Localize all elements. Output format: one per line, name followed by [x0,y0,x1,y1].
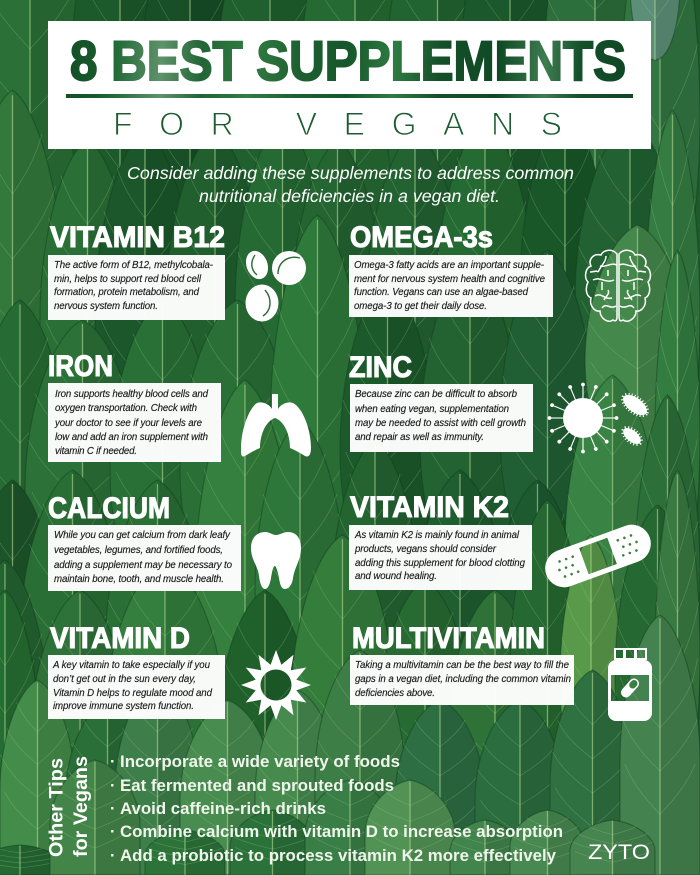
panel: vitamin k2: and wound healing. [355,571,437,582]
panel: multivitamin [350,622,574,705]
title banner [48,21,651,149]
panel: vitamin k2: products, vegans should consider [354,544,497,555]
intro text: nutritional deficiencies in a vegan diet. [199,186,500,206]
panel: multivitamin: deficiencies above. [355,688,435,699]
panel: zinc: may be needed to assist with cell growth [355,418,526,429]
panel: vitamin b12: min, helps to support red blood cell [54,274,202,285]
panel: calcium: CALCIUM [48,492,170,525]
panel: calcium: While you can get calcium from dark leafy [54,530,231,541]
intro text: Consider adding these supplements to address common [127,163,574,183]
panel: iron [48,350,221,462]
panel: iron: your doctor to see if your levels are [54,418,203,429]
tips list: · [110,800,116,818]
panel: vitamin b12 [48,221,225,320]
tips list: · [110,753,116,771]
icon: supplement bottle [608,648,652,721]
other tips heading: for Vegans [71,756,92,857]
panel: vitamin d: A key vitamin to take especially if you [52,660,211,671]
panel: multivitamin: Taking a multivitamin can be the best way to fill the [355,660,570,671]
panel: zinc: Because zinc can be difficult to absorb [355,389,518,400]
panel: calcium: adding a supplement may be necessary to [54,560,233,571]
panel: omega-3s: Omega-3 fatty acids are an important supple- [354,260,545,271]
icon: tooth [251,532,301,589]
panel: vitamin b12: The active form of B12, methylcobala- [54,260,214,271]
other tips heading [46,756,92,857]
panel: vitamin k2: As vitamin K2 is mainly found in animal [354,530,520,541]
icon: brain [586,250,650,321]
panel: vitamin k2: VITAMIN K2 [350,491,509,524]
subtitle: for vegans: FOR VEGANS [113,106,562,142]
panel: zinc [349,351,533,452]
tips list: Avoid caffeine-rich drinks [120,800,326,818]
panel: vitamin b12: VITAMIN B12 [50,221,225,254]
icon: virus and bacteria [548,383,650,453]
panel: iron: IRON [48,350,113,383]
icon: lungs [241,394,311,457]
panel: vitamin d: Vitamin D helps to regulate mood and [53,688,213,699]
panel: omega-3s: OMEGA-3s [350,221,493,254]
panel: vitamin d: VITAMIN D [50,622,190,655]
panel: omega-3s [349,221,553,317]
logo: zyto: ZYTO [588,841,650,864]
panel: vitamin d: improve immune system function. [53,701,194,712]
tips list [110,753,563,865]
tips list: Incorporate a wide variety of foods [120,753,400,771]
panel: zinc: when eating vegan, supplementation [355,404,509,415]
panel: multivitamin: MULTIVITAMIN [352,622,545,655]
intro text [127,163,574,206]
panel: zinc: ZINC [349,351,412,384]
panel: vitamin d: don’t get out in the sun every day, [53,674,196,685]
panel: iron: oxygen transportation. Check with [55,403,197,414]
panel: vitamin k2 [349,491,532,590]
other tips heading: Other Tips [46,758,68,857]
tips list: · [110,823,116,841]
icon: sun [241,650,311,720]
tips list: Add a probiotic to process vitamin K2 more effectively [120,847,557,865]
panel: iron: vitamin C if needed. [55,446,137,457]
panel: multivitamin: gaps in a vegan diet, including the common vitamin [355,674,571,685]
icon: blood cells [242,248,306,322]
tips list: Combine calcium with vitamin D to increase absorption [120,823,563,841]
panel: calcium [48,492,241,591]
panel: vitamin k2: adding this supplement for blood clotting [355,558,526,569]
panel: calcium: maintain bone, tooth, and muscle health. [54,574,224,585]
panel: vitamin b12: nervous system function. [54,301,158,312]
panel: omega-3s: function. Vegans can use an algae-based [354,287,529,298]
tips list: · [110,847,116,865]
panel: omega-3s: ment for nervous system health and cognitive [354,274,546,285]
tips list: Eat fermented and sprouted foods [120,777,394,795]
tips list: · [110,777,116,795]
panel: iron: Iron supports healthy blood cells and [55,389,209,400]
icon: bandage [540,519,656,593]
panel: zinc: and repair as well as immunity. [355,432,484,443]
panel: iron: low and add an iron supplement with [55,432,208,443]
panel: omega-3s: omega-3 to get their daily dose. [354,301,487,312]
panel: calcium: vegetables, legumes, and fortified foods, [54,545,223,556]
panel: vitamin b12: formation, protein metabolism, and [54,287,200,298]
panel: vitamin d [48,622,225,719]
title: 8 best supplements: 8 BEST SUPPLEMENTS [70,29,626,92]
